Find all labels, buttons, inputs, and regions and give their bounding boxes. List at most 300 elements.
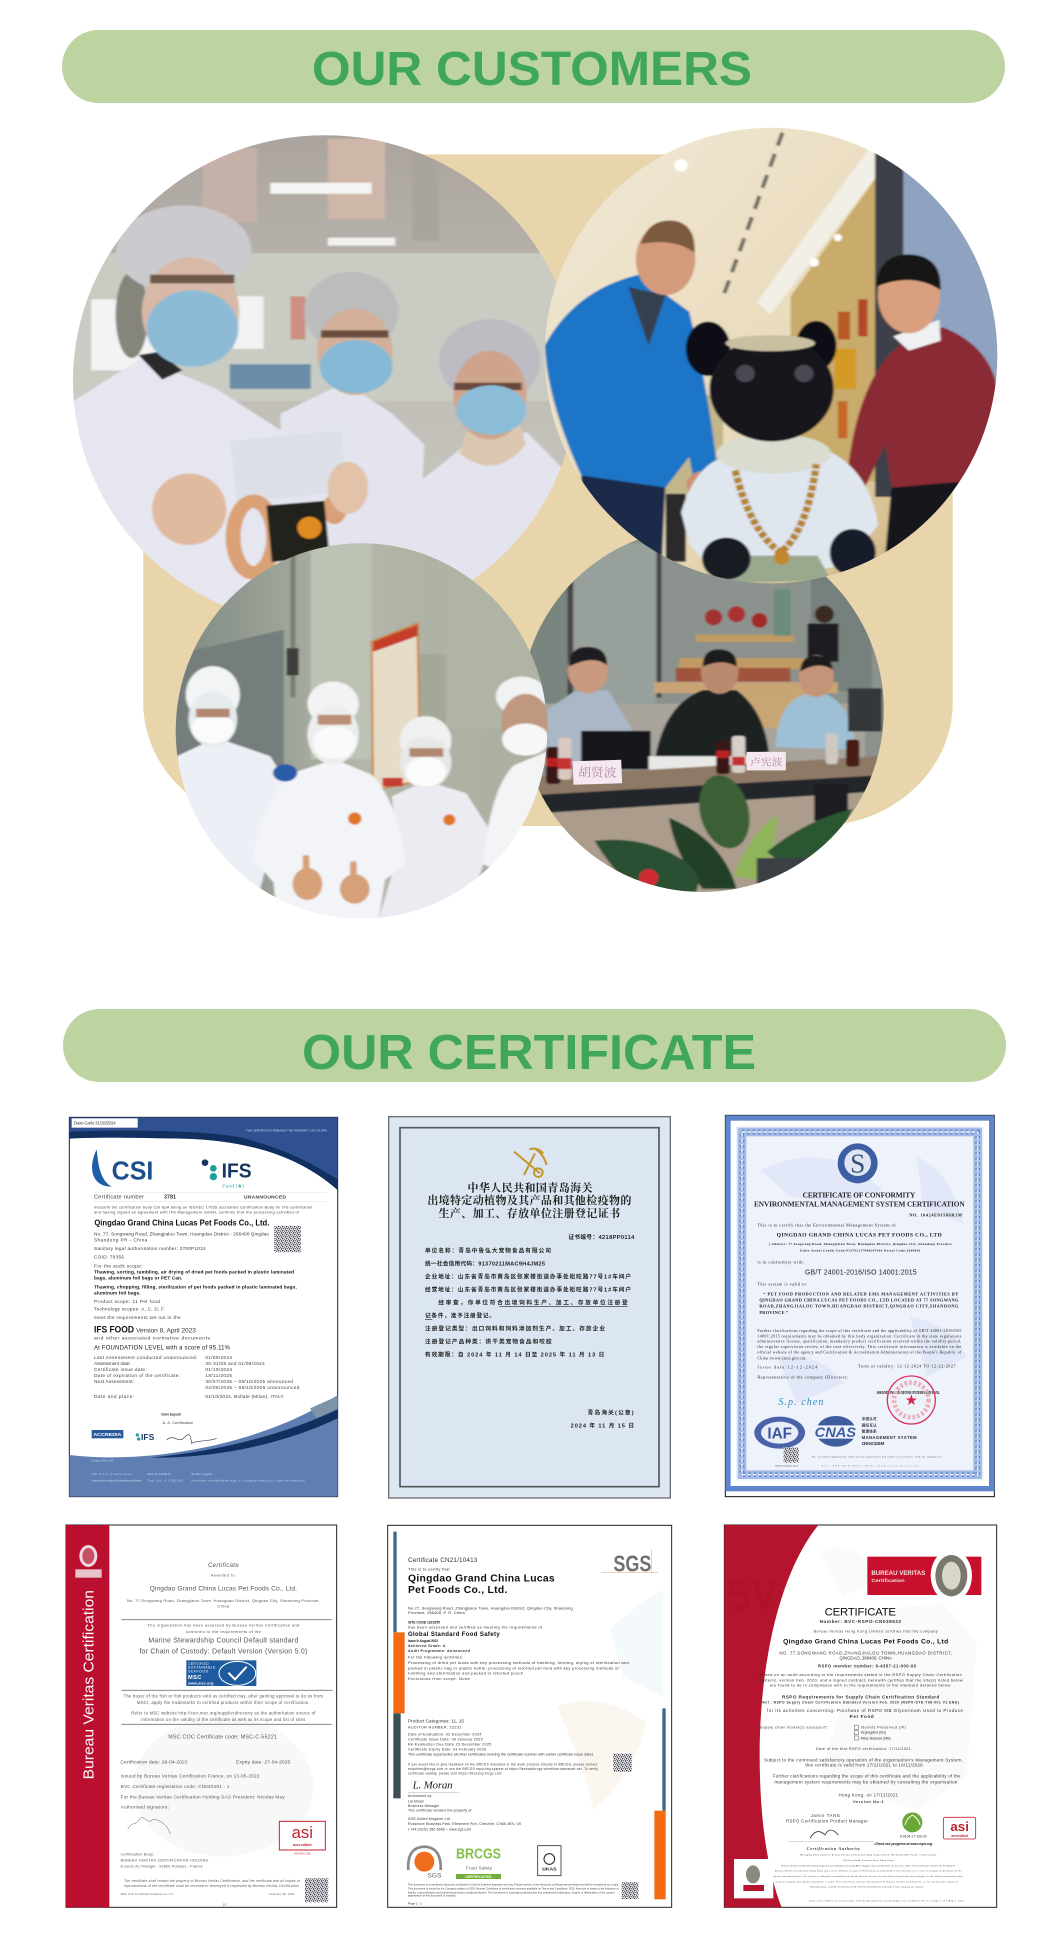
certificate text: RSPO Certification Product Manager	[786, 1819, 868, 1824]
certificate text: 2015_Client Name_Licensed Code_with No Background_CC-04_Edge Line to Mobile Rev 1.0 Page 2 of 3 Aug 5, 2021	[809, 1900, 965, 1903]
certificate text: Certificate number	[94, 1194, 144, 1200]
MSC blue label: www.msc.org	[187, 1681, 213, 1685]
customs body text: 经审查，你单位符合出境饲料生产、加工、存放单位注册登	[438, 1299, 628, 1307]
Bureau Veritas banner	[867, 1550, 981, 1602]
certificate text: Date of Evaluation: 02 December 2024	[408, 1732, 481, 1736]
certificate text	[408, 1557, 629, 1905]
certificate text: Global Standard Food Safety	[408, 1632, 500, 1638]
QR codes	[613, 1753, 638, 1899]
heading: our certificate	[63, 1009, 1006, 1082]
certificate: Bureau Veritas MSC	[66, 1525, 337, 1907]
certificate text: Certification Body:	[121, 1852, 154, 1856]
certificate text: Systems, version Feb. 2020, and a signed contract, herewith certifies that the site(s) listed below	[759, 1677, 963, 1682]
certificate text: Date and place:	[94, 1394, 134, 1399]
thumbs up	[293, 868, 322, 900]
certificate text: 14001:2015 requirements may be obtained by this body organization. Certificate in the state regulations	[757, 1333, 962, 1338]
customs body text: 注册登记类型：出口饲料和饲料添加剂生产、加工、存放企业	[425, 1325, 605, 1333]
SGS, BRCGS and UKAS marks	[408, 1846, 561, 1879]
certificate text: NO. 10424E01506R1M	[909, 1212, 962, 1217]
footer text: Azienda con sistemi di gestione certificata	[92, 1479, 142, 1483]
customs body text: 单位名称：青岛中鲁弘大宠物食品有限公司	[425, 1247, 551, 1255]
certificate text: this certificate is valid from 17/11/2021 to 16/11/2026	[805, 1762, 923, 1767]
red side band	[66, 1525, 109, 1907]
SGS, BRCGS and UKAS marks: SGS	[427, 1872, 442, 1879]
certificate text: appearance of this document is unlawful.	[408, 1895, 457, 1898]
certificate text: The buyer of the fish or fish products sold as certified may, after gaining approval to do so from	[124, 1694, 324, 1699]
certificate text: meet the requirements set out in the	[94, 1315, 181, 1320]
certificate text: No.77, Songwang Road, Zhangjialou Town, Huangdao District, Qingdao City, Shandong	[408, 1605, 573, 1610]
certificate text: Next Assessment:	[94, 1379, 134, 1384]
certificate text: Pet Foods Co., Ltd.	[408, 1585, 507, 1596]
certificate text: Carlo Esposti	[161, 1413, 181, 1417]
certificate text: Issue 9: August 2022	[408, 1639, 438, 1643]
SGS, BRCGS and UKAS marks: CERTIFICATED	[465, 1875, 492, 1879]
certificate text: Date of expiration of the certificate:	[94, 1373, 180, 1378]
clear bag with snack	[231, 436, 291, 500]
certificate text: This is to certify that	[408, 1567, 451, 1572]
certificate text: 3781	[164, 1194, 176, 1200]
name plates: 卢宪波	[750, 756, 783, 768]
certificate text: China	[217, 1604, 230, 1609]
certificate text: “ PET FOOD PRODUCTION AND RELATED EMS MANAGEMENT ACTIVITIES BY	[763, 1291, 959, 1296]
SGS, BRCGS and UKAS marks: Food Safety	[466, 1866, 493, 1871]
panel: customer photo collage	[68, 123, 1007, 923]
certificate text: GB/T 24001-2016/ISO 14001:2015	[805, 1269, 917, 1276]
certificate text: 中国认可	[862, 1416, 877, 1421]
world map watermark	[760, 1157, 967, 1403]
Bureau Veritas corner logo	[734, 1859, 773, 1898]
certificate text: 管理体系	[862, 1429, 877, 1434]
customs title	[427, 1181, 631, 1220]
certificate text: Certificate	[208, 1563, 239, 1569]
certificate text: MANAGEMENT SYSTEM	[862, 1435, 917, 1440]
certificate text: This system is valid to:	[757, 1281, 807, 1286]
photo: three women in hairnets with snack bag	[73, 135, 566, 606]
customs body text: 注册登记产品种类：烘干类宠物食品和咬胶	[425, 1338, 552, 1346]
certificate text: February 28, 2021	[269, 1892, 295, 1896]
red curved side panel	[724, 1525, 818, 1907]
globe watermark	[133, 1717, 313, 1857]
customs title: 生产、加工、存放单位注册登记证书	[438, 1206, 621, 1220]
certificate text: UNANNOUNCED	[244, 1194, 286, 1200]
certificate text: Certification date: 28-04-2022	[120, 1759, 188, 1765]
footer text: CSI S.p.A. a socio unico	[92, 1472, 132, 1476]
bottom blue band	[69, 1395, 338, 1497]
certificate text: Issued by Bureau Veritas Certification France, on 13-05-2022	[121, 1774, 260, 1779]
papers and table	[649, 756, 750, 770]
certificate text: This certificate remains the property of	[408, 1808, 471, 1812]
certificate text: Exclusions from scope: None	[408, 1676, 470, 1681]
certificate text: QINGDAO GRAND CHINA LUCAS PET FOODS CO., LTD	[777, 1232, 942, 1238]
certificate text: MSC CoC Certificate Template rev 7.0	[121, 1892, 173, 1896]
certificate text: management system requirements may be obtained by consulting the organisation.	[774, 1779, 959, 1784]
certificate text	[754, 1190, 965, 1468]
bottles	[546, 747, 561, 784]
certificate text: 30-31/08 and 01/09/2024	[205, 1361, 265, 1366]
certificate text: Rossmore Business Park, Ellesmere Port, Cheshire, CH65 3EN, UK	[408, 1822, 522, 1826]
certificate text: Segregated (SG)	[861, 1731, 886, 1735]
person 1	[176, 738, 287, 889]
seal logo	[838, 1143, 878, 1183]
certificate text: Mass Balance (MB)	[861, 1736, 891, 1740]
name plates	[573, 752, 786, 785]
certificate text: Version 8, April 2023	[136, 1327, 196, 1334]
vertical band title: Bureau Veritas Certification	[81, 1590, 97, 1779]
shelves	[696, 635, 794, 642]
customs body text: 统一社会信用代码：91370211MAC9H4JM25	[425, 1260, 545, 1268]
customs body text: 有效期限：自 2024 年 11 月 14 日至 2025 年 11 月 13 日	[425, 1351, 604, 1359]
certificate text: COID: 78356	[94, 1255, 124, 1260]
seal logo: S	[850, 1149, 865, 1179]
certificate text: are found to be in compliance with to the requirements of the standard detailed below:	[770, 1683, 952, 1688]
certificate text: NO. 77,SONGWANG ROAD,ZHANGJIALOU TOWN,HUANGDAO DISTRICT,	[779, 1651, 952, 1656]
heading band	[62, 30, 1005, 103]
certificate text: Business Manager	[408, 1804, 440, 1808]
footer text: REA MI 1466914	[147, 1472, 171, 1476]
certificate text: Processing of dried pet foods with key processing methods of tumbling, forming, drying or sterilization and	[408, 1660, 629, 1665]
certificate text: Qingdao Grand China Lucas Pet Foods Co., Ltd	[783, 1639, 948, 1646]
certificate text: If you would like to give feedback on the BRCGS Standard or the audit process directly to BRCGS, please contact	[408, 1763, 597, 1767]
IAF and CNAS logos: IAF	[767, 1425, 792, 1442]
CSI and IFS logos	[92, 1149, 252, 1188]
certificate text	[120, 1563, 333, 1907]
certificate text: This certificate supersedes all other certificates bearing the certificate number with earlier certificate issue dates	[408, 1752, 594, 1756]
certificate text: Qingdao Grand China Lucas	[408, 1573, 555, 1584]
CSI and IFS logos: IFS	[222, 1161, 252, 1183]
certificate text: Based on an audit according to the requirements stated in the RSPO Supply Chain Certification	[759, 1672, 962, 1677]
certificate text: Further clarifications regarding the scope of this certificate and the applicability of GB/T 24001-2016/ISO	[757, 1328, 961, 1333]
certificate text: Number: BVC-RSPO-CN038532	[820, 1619, 901, 1624]
certificate text: 01/10/2024	[205, 1367, 232, 1372]
certificate text: 1/1	[223, 1903, 227, 1907]
certificate text: Product scope: 11 Pet food	[94, 1299, 160, 1304]
certificate text: 8 cours du Triangle - 92800 Puteaux - France	[121, 1864, 203, 1868]
certificate text: No. 77, Songwang Road, Zhangjialou Town, Huangdao District - 266400 Qingdao	[94, 1231, 269, 1236]
certificate text: PROVINCE ”	[759, 1310, 788, 1315]
certificate text: This document is issued by the Company subject to SGS General Conditions of certification services available on Terms and Conditions. SGS. Attention is drawn to the limitation of	[408, 1887, 619, 1890]
certificate text: Assessment date:	[94, 1361, 131, 1366]
certificate text: Managing office address: Bureau Veritas Certification Hong Kong Limited, Rm 05-06 06/F, Pacific Trade Century	[800, 1854, 937, 1857]
person 3	[378, 781, 488, 920]
standing woman	[815, 606, 834, 623]
certificate text: At FOUNDATION LEVEL with a score of 95.11%	[94, 1346, 231, 1352]
certificate text: Jamie TANG	[811, 1813, 840, 1818]
photo: staff in white cleanroom suits	[172, 540, 554, 923]
certificate text: MSCI, apply the trademarks to certified products within their scope of certification.	[137, 1700, 310, 1705]
certificate: SGS BRCGS food safety	[388, 1525, 672, 1907]
MSC blue label: CERTIFIED	[188, 1662, 209, 1666]
top blue band	[69, 1117, 338, 1190]
certificate text: Shandong PR - China	[94, 1237, 148, 1242]
customs body text: 记条件，准予注册登记。	[425, 1312, 495, 1320]
certificate text: 04/06/2025 – 08/10/2025 unannounced	[205, 1385, 300, 1390]
customs title: 中华人民共和国青岛海关	[467, 1181, 592, 1195]
certificate text: Authorised signature:	[121, 1804, 169, 1809]
certificate text: Only an original and signed Certificate is valid. This Certificate remains the property of Bureau Veritas Certification, as for Certificates copies or	[775, 1880, 958, 1883]
certificate text: Certificate Issue Date: 06 January 2025	[408, 1737, 483, 1741]
certificate text: Expiry date: 27-04-2025	[236, 1759, 291, 1765]
certificate text: Issue date:12-12-2024	[757, 1364, 818, 1369]
checkboxes	[854, 1725, 858, 1740]
certificate text: Page 1 / 1	[408, 1901, 422, 1905]
hands	[152, 473, 226, 545]
laptop	[581, 731, 651, 769]
certificate text: Qingdao Grand China Lucas Pet Foods Co., Ltd.	[150, 1585, 297, 1592]
certificate text: Ref.: RSPO Supply Chain Certification Standard Version Feb. 2020 (RSPO-STD-T06-001 V2 ENG)	[762, 1701, 959, 1705]
certificate text: Tel: 400-872-8617 Web: www.seaton.net.cn	[822, 1465, 919, 1468]
certificate text: conforms to the requirements of the	[186, 1629, 262, 1634]
name plates: 胡贤波	[578, 765, 617, 779]
certificate text: Re-Evaluation Due Date 23 December 2025	[408, 1742, 491, 1746]
certificate text: The certificate shall remain the property of Bureau Veritas Certification, and the certificate and all copies or	[124, 1879, 301, 1883]
contour watermark	[557, 1701, 647, 1810]
certificate text: 01/09/2024	[205, 1355, 232, 1360]
footer text: direzione.centrale@csi-spa.it | info@csi-spa.com | www.csi-spa.com	[191, 1479, 305, 1483]
certificate: CSI IFS Food: Dass Carlo 31/10/2024	[74, 1121, 116, 1126]
heading text: OUR CERTIFICATE	[302, 1026, 756, 1080]
certificate text: packed in plastic bag or plastic bottle; processing of retorted pet food with key processing methods of	[408, 1665, 620, 1670]
certificate text: Inesseth the certification body CSI SpA being an ISO/IEC 17065 accredited Certification Body for IFS certification	[94, 1205, 312, 1209]
certificate text: QINGDAO GRAND CHINA LUCAS PET FOODS CO., LTD LOCATED AT 77 SONGWANG	[759, 1297, 959, 1302]
certificate text: 01/10/2024, Bollate (Milan), ITALY	[205, 1394, 284, 1399]
certificate text: above mentioned data. The holder is obliged to immediately inform Bureau Veritas Certification Hong Kong any changes to the above mentioned data.	[773, 1875, 964, 1878]
red round stamp	[887, 1376, 935, 1424]
certificate: CSI IFS Food: THE CERTIFICATE REMAINS THE PROPERTY OF CSI SPA	[246, 1129, 327, 1133]
band logo	[75, 1545, 102, 1578]
wavy border	[742, 1132, 978, 1475]
certificate text: CERTIFICATE OF CONFORMITY	[803, 1190, 916, 1199]
photo: boardroom meeting	[517, 525, 889, 895]
certificate text: Bureau Veritas Certification Hong Kong and can be inflation in case of Termination as presented in the Contract or in case of changes or deviation to the	[775, 1870, 962, 1873]
customs title: 出境特定动植物及其产品和其他检疫物的	[427, 1193, 631, 1207]
certificate text: For the Bureau Veritas Certification Holding SAS President: Nicolas May	[121, 1794, 285, 1799]
certificate text: Awarded to	[211, 1572, 235, 1577]
certificate text: QINGDAO, 266400, CHINA	[839, 1656, 892, 1661]
certificate text: 30/07/2025 – 08/10/2025 announced	[205, 1379, 293, 1384]
certificate text: Thawing, sorting, tumbling, air drying of dried pet foods packed in plastic laminated	[94, 1270, 294, 1275]
customs body text: 青岛海关(公章)	[588, 1408, 634, 1416]
certificate text: Technology scopes: A, C, D, F	[94, 1307, 164, 1312]
second woman	[280, 388, 426, 550]
certificate text: BVC Certificate registration code: CN040491 - 1	[121, 1784, 230, 1789]
bulldog statue	[681, 451, 878, 577]
certificate text: Representative of the company (Director):	[757, 1375, 848, 1380]
certificate text: Further clarifications regarding the scope of this certificate and the applicability of the	[773, 1774, 961, 1779]
customs body text: 证书编号：4218PP0114	[568, 1233, 635, 1241]
customs body text: 企业地址：山东省青岛市黄岛区张家楼街道办事处松旺路77号1#车间户	[425, 1273, 631, 1281]
footer text: Cap. Soc. € 1.080.000	[147, 1479, 184, 1483]
certificate text: for Chain of Custody: Default Version (Version 5.0)	[139, 1648, 307, 1655]
map watermark	[820, 1548, 977, 1810]
certificate text: MSC COC Certificate code: MSC-C-55221	[168, 1735, 277, 1741]
certificate text: L. Moran	[412, 1779, 453, 1791]
plant	[698, 774, 751, 849]
certificate text: Lal Moran	[408, 1800, 424, 1804]
certificate text	[93, 1193, 327, 1425]
certificate text: t +44 (0)151 350-6666 – www.sgs.com	[408, 1827, 471, 1831]
signature, RSPO and asi marks	[788, 1812, 976, 1842]
MSC blue label: SUSTAINABLE	[188, 1666, 216, 1670]
first woman	[74, 359, 283, 606]
certificate text: ROAD,ZHANGJIALOU TOWN,HUANGDAO DISTRICT,QINGDAO CITY,SHANDONG	[759, 1303, 959, 1308]
certificate text: Certification Authority	[807, 1846, 860, 1851]
certificate: Qingdao Customs registration	[389, 1117, 670, 1498]
certificate text: Last Assessment conducted unannounced:	[94, 1355, 197, 1360]
certificate text: 8d Hing Road, Kowloon Bay, Hong Kong	[843, 1860, 894, 1862]
accreditation logos and signature: ACCREDIA	[93, 1432, 122, 1437]
certificate text: SITE CODE 1321655	[408, 1620, 440, 1624]
SGS, BRCGS and UKAS marks: BRCGS	[456, 1847, 501, 1863]
certificate text: for its activities concerning: Purchase of RSPO MB Glycerinum Used to Produce	[767, 1708, 963, 1713]
customs body text: 2024 年 11 月 15 日	[571, 1422, 634, 1430]
CSI and IFS logos: Food (★)	[222, 1183, 244, 1188]
certificate text: ENVIRONMENTAL MANAGEMENT SYSTEM CERTIFICATION	[754, 1200, 965, 1209]
certificate text: Unity Social Credit Code:91370211790826746J Postal Code:266000)	[800, 1248, 920, 1252]
certificate text: The organisation has been assessed by Bureau Veritas Certification and	[147, 1622, 299, 1627]
certificate text: official website of the agency and Certification & Accreditation Administration of the People's Republic of	[757, 1349, 962, 1354]
certificate text: CNAS C104-M	[862, 1441, 885, 1446]
certificate: Bureau Veritas RSPO	[724, 1525, 997, 1907]
certificate text: This is to certify that the Environmental Management System of	[757, 1222, 896, 1227]
certificate text: Hong Kong, on 17/11/2021	[839, 1792, 899, 1797]
certificate text: Identity Preserved (IP)	[861, 1726, 906, 1730]
asi logo: accredited	[293, 1843, 311, 1847]
heading band	[63, 1009, 1006, 1082]
footer text: Dates effect 00	[92, 1459, 114, 1463]
certificate text: bags, aluminum foil bags or PET Can.	[94, 1276, 182, 1281]
MSC blue label	[186, 1660, 256, 1686]
customs body text	[425, 1233, 635, 1430]
certificate text: The certified organization shall accept supervision and audit in accordance with the regulations	[812, 1455, 942, 1458]
certificate text: liability, indemnification and jurisdictional issues contained therein. This document is copyright protected and any unauthorized alteration, forgery or falsification of the content	[408, 1891, 615, 1894]
heading: our customers	[62, 30, 1005, 103]
certificate: Bureau Veritas RSPO: SV	[727, 1572, 777, 1620]
certificate text: Qingdao Grand China Lucas Pet Foods Co., Ltd.	[94, 1218, 269, 1228]
certificate text: the regular supervision review of the case effectively. This certificate information is available on the	[757, 1344, 962, 1349]
certificate text: Refer to MSC website http://cert.msc.org/supplierdirectory as the authoritative source of	[131, 1710, 316, 1715]
certificate text: Certificate Expiry Date: 03 February 2026	[408, 1747, 486, 1751]
customs body text: 经营地址：山东省青岛市黄岛区张家楼街道办事处松旺路77号1#车间户	[425, 1286, 631, 1294]
certificate text: Sanitary legal authorisation number: 3700P1024	[94, 1246, 206, 1251]
certificate text: Product Categories: 11, 15	[408, 1718, 464, 1723]
footer text	[92, 1459, 305, 1483]
side colour bars	[393, 1532, 666, 1899]
accreditation logos and signature: IFS	[141, 1433, 155, 1442]
men	[547, 690, 632, 765]
certificate text: This document is an authentic electronic certificate for Client's business purposes use only. Printed version of the electronic certificate are permitted and will be considered as a copy.	[408, 1883, 619, 1886]
certificate: CSI IFS Food	[69, 1117, 338, 1497]
signature, RSPO and asi marks: asi	[950, 1819, 969, 1834]
QR code	[305, 1878, 328, 1902]
certificate text: Pet Food	[850, 1714, 874, 1719]
beige rounded backdrop	[143, 154, 953, 826]
certificate text: enquiries@brcgs.com or use the BRCGS reporting system at https://feebackbrcgs.wheelbarrowmarket.net. To verify	[408, 1767, 598, 1771]
MSC blue label: SEAFOOD	[188, 1669, 209, 1673]
certificate text: BUREAU VERITAS CERTIFICATION HOLDING	[121, 1858, 208, 1862]
certificate text: IFS FOOD	[94, 1324, 134, 1334]
certificate text: aluminum foil bags.	[94, 1290, 141, 1295]
customs emblem	[514, 1149, 547, 1177]
certificate text: 国际互认	[862, 1423, 877, 1428]
certificate text: Term of validity: 12-12-2024 TO 12-22-2027	[858, 1363, 956, 1368]
certificate text: A. A. Certification	[163, 1421, 193, 1425]
certificate text: For the audit scope:	[94, 1264, 142, 1269]
asi logo	[279, 1821, 325, 1855]
certificate text: No. 77,Songwang Road, Zhangjialou Town, Huangdao District, Qingdao City, Shandong Province,	[127, 1598, 320, 1603]
certificate text: Bureau Veritas Certification Hong Kong has accreditation issued by ASI's Supply Chain Certification on 1st June, 2014. This Certificate remains the Property of	[782, 1864, 955, 1867]
certificate text: has been assessed and certified as meeting the requirements of	[408, 1625, 543, 1630]
certificate text: CERTIFICATE	[825, 1606, 896, 1618]
certificate text: Province, 266400, P. R. China	[408, 1610, 465, 1615]
certificate text: Marine Stewardship Council Default standard	[148, 1637, 298, 1644]
certificate text: Version No:1	[853, 1799, 884, 1804]
certificate text: information on the validity of the certificate as well as its scope and list of sites	[141, 1717, 305, 1722]
certificate text: Reproductions, and the Certificate itself shall be immediately returned to any company on request	[810, 1886, 924, 1889]
MSC blue label: MSC	[188, 1675, 201, 1681]
certificate text: AUDITOR NUMBER: 22231	[408, 1725, 461, 1729]
certificate text: RSPO member number: 9-4357-21-000-00	[818, 1664, 917, 1669]
man in red sweater	[884, 480, 960, 553]
QR code	[274, 1226, 301, 1252]
CSI and IFS logos: CSI	[112, 1155, 153, 1185]
heading text: OUR CUSTOMERS	[312, 43, 752, 96]
Bureau Veritas banner: BUREAU VERITAS	[871, 1570, 926, 1577]
person 4	[482, 751, 546, 868]
certificate text: Date of the first RSPO certification: 17/11/2021	[816, 1747, 911, 1751]
certificate text: S.p. chen	[778, 1397, 823, 1408]
man in blue jacket	[581, 475, 666, 556]
certificate text: administrative license, qualification, mandatory product certification received within the validity period,	[757, 1339, 961, 1345]
certificate text: and other associated normative documents	[94, 1335, 210, 1341]
certificate text: Subject to the continued satisfactory operation of the organisation's Management System,	[764, 1757, 963, 1762]
certificate text: SHANDONG SEATONE INTERNATIONAL	[877, 1391, 941, 1395]
photo: visitors with bulldog statue	[541, 123, 1007, 593]
certificate text: Check our progress at www.rspo.org	[874, 1842, 933, 1846]
IAF and CNAS logos: CNAS	[815, 1424, 857, 1440]
certificate text: and having signed an agreement with IFS Management GmbH, confirms that the processing activities of	[94, 1210, 300, 1214]
certificate text: RSPO Requirements for Supply Chain Certification Standard	[782, 1694, 939, 1699]
certificate text: Supply chain model(s) assessed*:	[760, 1726, 828, 1730]
signature, RSPO and asi marks: accredited	[951, 1834, 968, 1838]
certificate text: ( Address: 77 Songwang Road, Zhangjialou Town, Huangdao District, Qingdao City, Shandong Province	[769, 1242, 952, 1246]
certificate text: Thawing, chopping, filling, sterilization of pet foods packed in plastic laminated bags,	[94, 1285, 297, 1290]
asi logo: asi	[292, 1823, 313, 1842]
SGS, BRCGS and UKAS marks: UKAS	[542, 1866, 557, 1872]
person 2	[264, 762, 403, 918]
red round stamp: ★	[905, 1393, 917, 1407]
certificate text: SGS United Kingdom Ltd	[408, 1817, 450, 1821]
hand left and right	[686, 470, 702, 491]
certificate text: certificate validity, please visit https://directory.brcgs.com	[408, 1771, 502, 1775]
Bureau Veritas banner: Certification	[871, 1578, 905, 1584]
certificate text: Audit Programme: Announced	[408, 1649, 470, 1653]
certificate text: For the following activities:	[408, 1654, 463, 1659]
third woman	[418, 432, 561, 580]
signature, RSPO and asi marks: 8-0104-17-100-00	[900, 1834, 927, 1838]
certificate text: Certificate issue date:	[94, 1367, 147, 1372]
certificate text: 18/11/2025	[205, 1373, 232, 1378]
certificate text: Certificate CN21/10413	[408, 1557, 478, 1564]
certificate text: Achieved Grade: A	[408, 1644, 446, 1648]
footer text: Sede legale	[191, 1472, 212, 1476]
SGS logo: SGS	[613, 1551, 651, 1577]
certificate text: Authorised by	[408, 1794, 432, 1798]
certificate: Environmental management system	[725, 1115, 994, 1497]
certificate text	[759, 1606, 965, 1903]
certificate text: reproductions of the certificate shall be returned or destroyed if requested by Bureau Veritas Certification	[124, 1884, 299, 1888]
certificate text: Bureau Veritas Hong Kong Limited certifies that the company	[814, 1629, 938, 1633]
accreditation logos and signature	[92, 1430, 217, 1443]
